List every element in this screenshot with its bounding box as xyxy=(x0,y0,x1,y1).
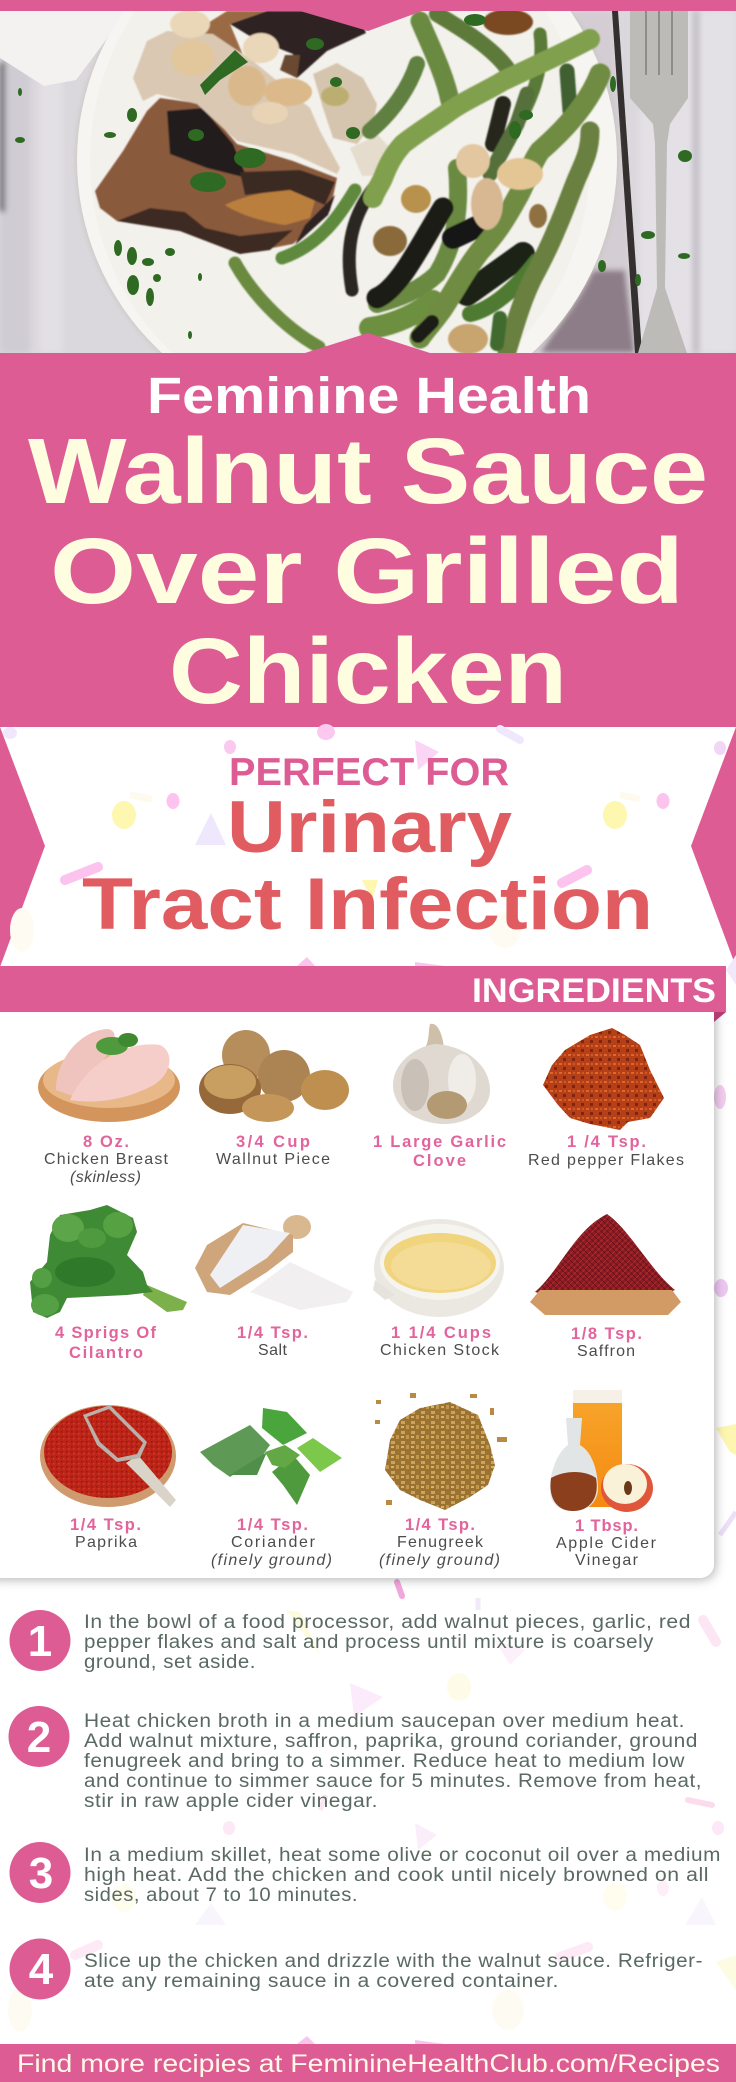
step 2 text: stir in raw apple cider vinegar. xyxy=(84,1791,378,1812)
ingredients card xyxy=(0,966,726,1578)
label: apple cider vinegar: Apple Cider xyxy=(556,1535,657,1552)
step 3 xyxy=(10,1842,721,1906)
label: PERFECT FOR: PERFECT FOR xyxy=(229,751,509,794)
ingredients header band: INGREDIENTS xyxy=(472,972,716,1010)
step 2 text: fenugreek and bring to a simmer. Reduce heat to medium low xyxy=(84,1751,685,1772)
step 2 text: Add walnut mixture, saffron, paprika, ground coriander, ground xyxy=(84,1731,698,1752)
label: garlic xyxy=(373,1133,506,1170)
step 4 text: ate any remaining sauce in a covered container. xyxy=(84,1971,559,1992)
title panel xyxy=(0,333,736,728)
step 3 text: high heat. Add the chicken and cook until nicely browned on all xyxy=(84,1865,709,1886)
label: coriander: 1/4 Tsp. xyxy=(237,1516,308,1534)
heading: Tract Infection: Tract Infection xyxy=(82,864,653,945)
confetti: margin and steps background xyxy=(8,955,736,2044)
number badge 3 xyxy=(10,1842,70,1903)
label: chicken breast: 8 Oz. xyxy=(83,1133,129,1151)
step 1 text: pepper flakes and salt and process until mixture is coarsely xyxy=(84,1632,654,1653)
title: Over Grilled: Over Grilled xyxy=(50,519,684,623)
step 1 text: In the bowl of a food processor, add walnut pieces, garlic, red xyxy=(84,1612,691,1633)
footer band: Find more recipies at FeminineHealthClub.com/Recipes xyxy=(17,2050,720,2078)
ingredient: chicken stock xyxy=(373,1219,504,1317)
ingredient: chicken breast xyxy=(38,1029,180,1122)
ingredient: salt xyxy=(195,1215,353,1310)
step 3 text: In a medium skillet, heat some olive or coconut oil over a medium xyxy=(84,1845,721,1866)
step 4 xyxy=(10,1938,703,2000)
number badge 4 xyxy=(10,1938,70,2000)
label: salt: Salt xyxy=(258,1342,288,1359)
label: red pepper flakes xyxy=(528,1133,684,1169)
label: paprika: 1/4 Tsp. xyxy=(70,1516,141,1534)
label: chicken stock xyxy=(380,1324,500,1359)
label: chicken breast xyxy=(44,1133,169,1186)
label: red pepper flakes: Red pepper Flakes xyxy=(528,1152,684,1169)
label: coriander: Coriander xyxy=(231,1534,316,1551)
napkin xyxy=(0,11,124,86)
fork xyxy=(630,11,688,353)
number badge 2: 2 xyxy=(27,1713,51,1762)
label: fenugreek: (finely ground) xyxy=(379,1552,500,1569)
chicken and sauce xyxy=(95,10,392,254)
plate xyxy=(74,11,622,353)
label: saffron: Saffron xyxy=(577,1343,635,1360)
label: saffron: 1/8 Tsp. xyxy=(571,1325,642,1343)
number badge 3: 3 xyxy=(29,1849,53,1898)
ingredient: fenugreek xyxy=(375,1393,507,1510)
ingredient: coriander xyxy=(200,1408,342,1505)
label: walnut: 3/4 Cup xyxy=(236,1133,310,1151)
step 3 text: sides, about 7 to 10 minutes. xyxy=(84,1885,358,1906)
step 4 text: Slice up the chicken and drizzle with the walnut sauce. Refriger- xyxy=(84,1951,703,1972)
label: apple cider vinegar xyxy=(556,1517,657,1569)
label: chicken breast: (skinless) xyxy=(70,1169,141,1186)
label: walnut xyxy=(216,1133,330,1168)
label: fenugreek: Fenugreek xyxy=(397,1534,484,1551)
top pink band with notch xyxy=(0,0,736,31)
footer band xyxy=(0,2044,736,2082)
ingredient: apple cider vinegar xyxy=(550,1390,653,1512)
step 1 text: ground, set aside. xyxy=(84,1652,256,1673)
number badge 2 xyxy=(8,1706,70,1767)
label: coriander xyxy=(211,1516,332,1569)
number badge 1 xyxy=(10,1610,70,1671)
label: fenugreek: 1/4 Tsp. xyxy=(405,1516,475,1534)
label: cilantro: 4 Sprigs Of xyxy=(55,1324,156,1342)
ingredient: walnuts xyxy=(199,1030,349,1122)
number badge 4: 4 xyxy=(29,1945,54,1994)
step 4 text xyxy=(84,1951,703,1992)
label: cilantro: Cilantro xyxy=(69,1344,143,1362)
ribbon banner xyxy=(0,724,736,967)
label: chicken stock: Chicken Stock xyxy=(380,1342,500,1359)
label: cilantro xyxy=(55,1324,156,1362)
green beans xyxy=(235,14,600,351)
label: walnut: Wallnut Piece xyxy=(216,1151,330,1168)
label: apple cider vinegar: 1 Tbsp. xyxy=(575,1517,638,1535)
label: salt xyxy=(237,1324,308,1359)
label: paprika xyxy=(70,1516,141,1551)
label: coriander: (finely ground) xyxy=(211,1552,332,1569)
label: saffron xyxy=(571,1325,642,1360)
label: garlic: 1 Large Garlic xyxy=(373,1133,506,1151)
label: chicken stock: 1 1/4 Cups xyxy=(391,1324,491,1342)
label: fenugreek xyxy=(379,1516,500,1569)
label: garlic: Clove xyxy=(413,1152,466,1170)
step 1 xyxy=(10,1610,691,1673)
title: Feminine Health: Feminine Health xyxy=(147,367,591,424)
step 2 text: Heat chicken broth in a medium saucepan over medium heat. xyxy=(84,1711,685,1732)
hero photo: grilled chicken with green beans xyxy=(0,11,736,353)
step 3 text xyxy=(84,1845,721,1906)
label: chicken breast: Chicken Breast xyxy=(44,1151,169,1168)
ingredient: saffron xyxy=(530,1214,681,1315)
ingredient: garlic xyxy=(393,1024,490,1124)
label: red pepper flakes: 1 /4 Tsp. xyxy=(567,1133,646,1151)
label: paprika: Paprika xyxy=(75,1534,137,1551)
heading: Urinary: Urinary xyxy=(227,787,512,868)
label: salt: 1/4 Tsp. xyxy=(237,1324,308,1342)
step 2 text: and continue to simmer sauce for 5 minutes. Remove from heat, xyxy=(84,1771,702,1792)
title: Walnut Sauce: Walnut Sauce xyxy=(28,419,708,523)
title: Chicken: Chicken xyxy=(169,619,567,723)
ingredient: red pepper flakes xyxy=(543,1028,664,1130)
number badge 1: 1 xyxy=(28,1617,52,1666)
step 2 xyxy=(8,1706,702,1812)
parsley flecks xyxy=(15,14,692,339)
step 1 text xyxy=(84,1612,691,1673)
ingredient: cilantro xyxy=(30,1205,187,1318)
ribbon confetti xyxy=(3,724,726,966)
walnut chunks xyxy=(373,9,547,354)
label: apple cider vinegar: Vinegar xyxy=(575,1552,639,1569)
step 2 text xyxy=(84,1711,702,1812)
ingredients header band xyxy=(0,966,726,1022)
ingredient: paprika xyxy=(40,1405,176,1507)
